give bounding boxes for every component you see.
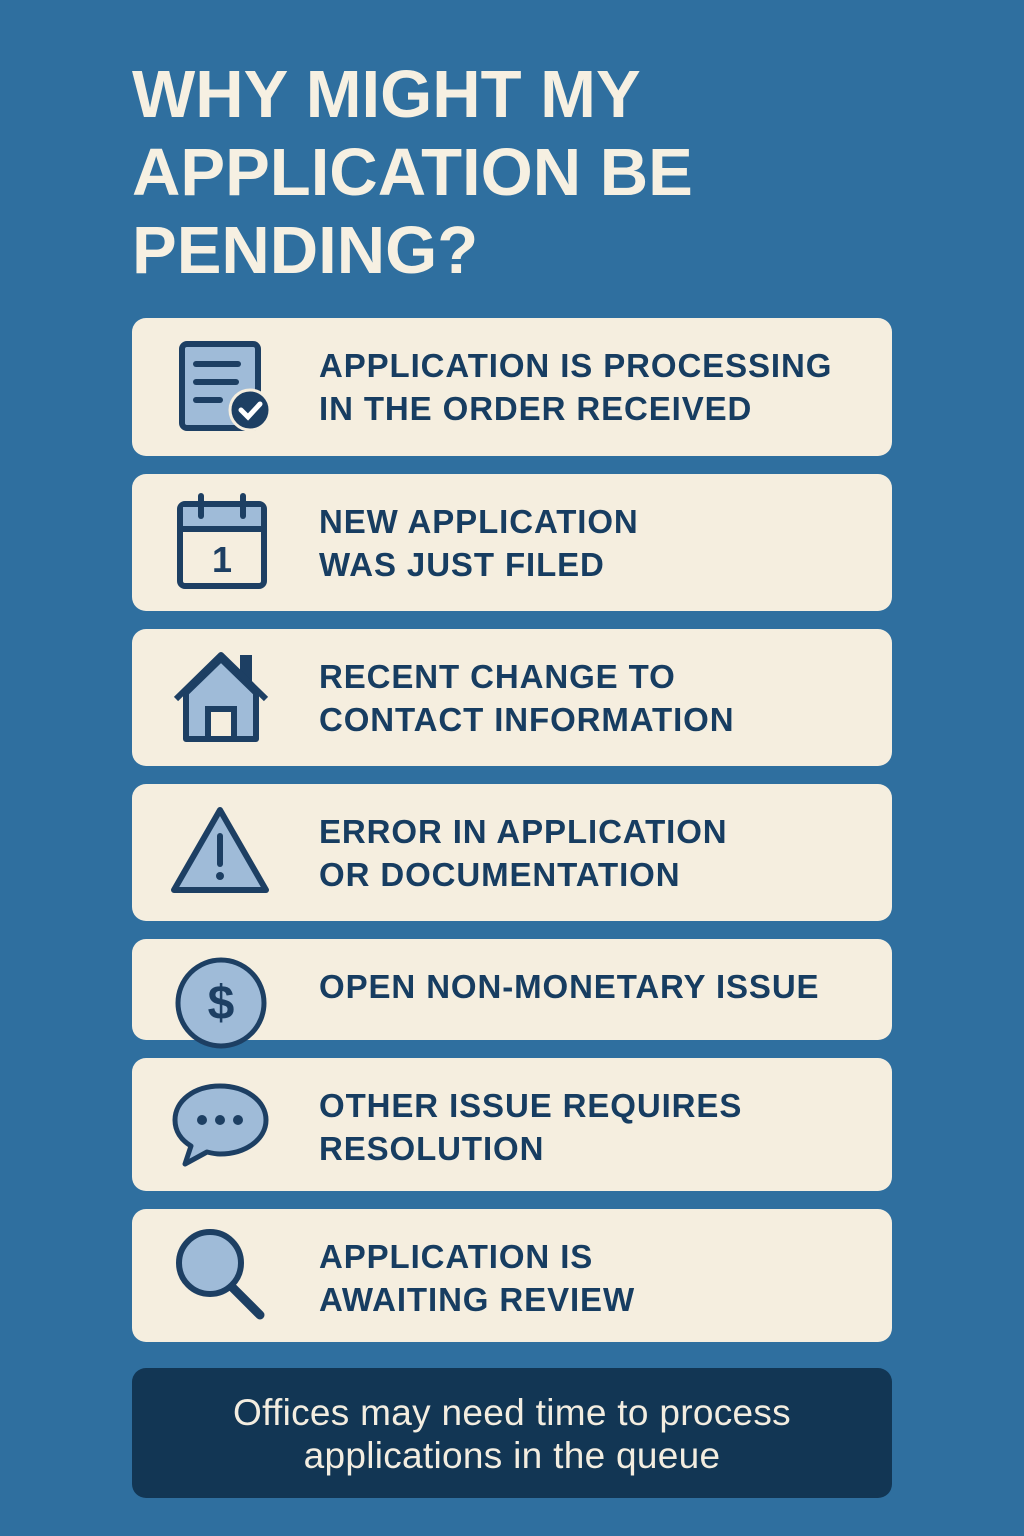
card: new application [132,474,892,611]
text: ERROR IN APPLICATION [319,813,728,850]
text [319,503,639,583]
text: AWAITING REVIEW [319,1281,635,1318]
text: OPEN NON-MONETARY ISSUE [319,968,819,1005]
card: processing in order [132,318,892,456]
text: RECENT CHANGE TO [319,658,676,695]
text [319,658,734,738]
text: WAS JUST FILED [319,546,605,583]
icon: calendar [177,493,267,589]
footer note [132,1368,892,1498]
text [319,347,832,427]
text: CONTACT INFORMATION [319,701,734,738]
title: PENDING? [132,213,478,288]
icon: magnifier [176,1229,264,1320]
icon: calendar: 1 [212,539,232,580]
card: error [132,784,892,921]
card: contact change [132,629,892,766]
title: APPLICATION BE [132,135,693,210]
title [132,57,693,288]
card: other issue [132,1058,892,1191]
footer note: Offices may need time to process [233,1392,791,1433]
text [319,1238,635,1318]
text: OR DOCUMENTATION [319,856,680,893]
text: RESOLUTION [319,1130,544,1167]
text: NEW APPLICATION [319,503,639,540]
text: APPLICATION IS [319,1238,593,1275]
text [319,1087,742,1167]
title: WHY MIGHT MY [132,57,641,132]
icon: house [174,652,268,742]
text: OTHER ISSUE REQUIRES [319,1087,742,1124]
text: APPLICATION IS PROCESSING [319,347,832,384]
card: non-monetary [132,939,892,1040]
icon: speech bubble [172,1084,268,1166]
icon: warning [171,807,269,893]
icon: dollar coin: $ [208,977,235,1030]
icon: document check [179,341,268,431]
card: awaiting review [132,1209,892,1342]
text: IN THE ORDER RECEIVED [319,390,752,427]
icon: dollar coin [176,958,266,1048]
footer note: applications in the queue [304,1435,720,1476]
text [319,813,728,893]
